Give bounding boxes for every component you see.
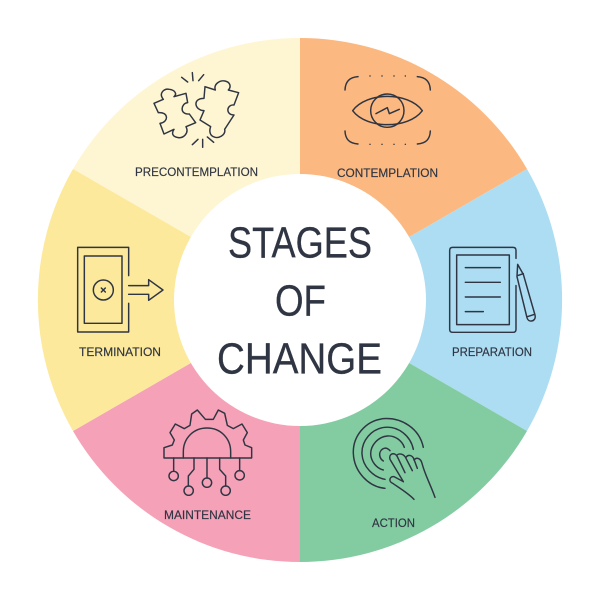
title: OF — [275, 278, 326, 326]
label: contemplation: CONTEMPLATION — [337, 168, 438, 180]
label: preparation: PREPARATION — [452, 347, 532, 359]
panel: action segment — [300, 300, 527, 562]
label: precontemplation: PRECONTEMPLATION — [135, 167, 258, 179]
panel: termination segment — [38, 169, 300, 431]
icon: exit door with arrow — [78, 247, 163, 332]
icon: touch gesture — [353, 419, 435, 499]
title: CHANGE — [217, 336, 382, 384]
icon: puzzle pieces — [154, 73, 239, 147]
title — [217, 220, 382, 384]
icon: document and pencil — [450, 247, 535, 332]
label: termination: TERMINATION — [79, 347, 161, 359]
panel: precontemplation segment — [73, 38, 300, 300]
title: STAGES — [228, 220, 372, 268]
icon: eye — [345, 76, 430, 144]
icon: gear circuit — [164, 410, 252, 495]
label: maintenance: MAINTENANCE — [164, 510, 251, 522]
panel: maintenance segment — [73, 300, 300, 562]
panel: contemplation segment — [300, 38, 527, 300]
label: action: ACTION — [372, 518, 415, 530]
center circle — [174, 174, 426, 426]
panel: preparation segment — [300, 169, 562, 431]
